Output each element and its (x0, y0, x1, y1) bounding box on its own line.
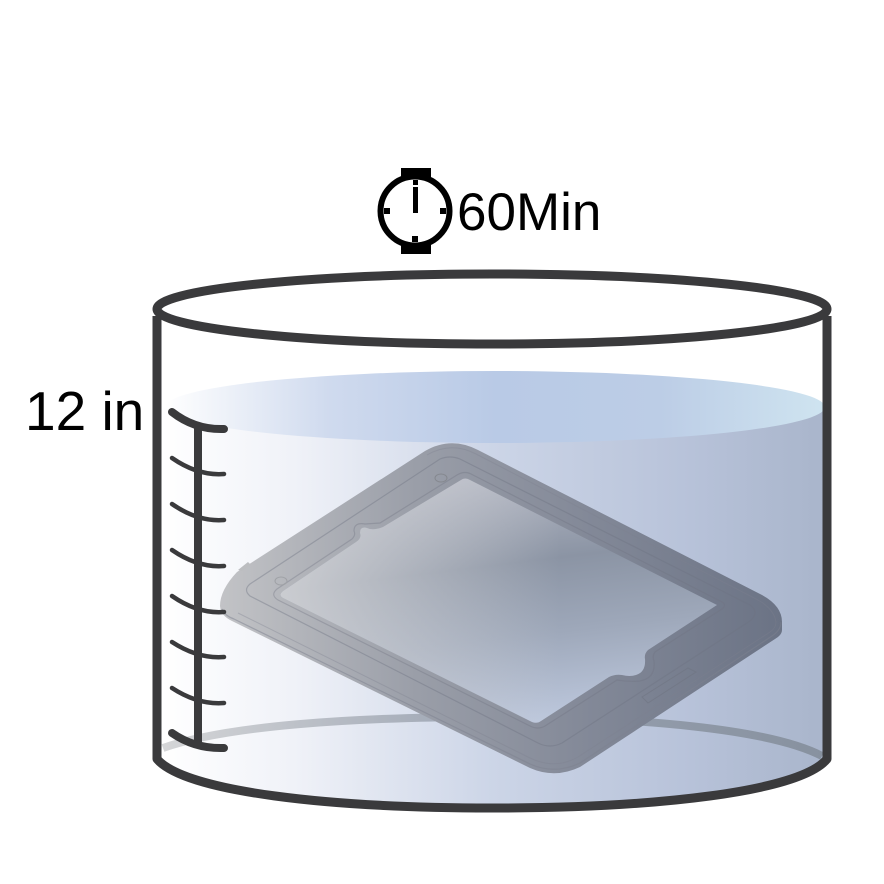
container walls (157, 316, 827, 759)
tablet screen (280, 478, 717, 723)
tablet bezel inner line (274, 472, 724, 728)
tablet side button slot (642, 668, 696, 703)
water surface (165, 371, 825, 443)
container rim (157, 274, 827, 344)
tablet body (220, 443, 782, 773)
tablet camera top (435, 474, 447, 482)
icon: stopwatch (380, 168, 450, 254)
tablet (220, 443, 782, 773)
gauge top mark (172, 412, 224, 429)
container bottom (157, 759, 827, 808)
tablet bezel outer line (246, 457, 755, 746)
container floor far edge (163, 717, 822, 756)
water body (161, 407, 823, 806)
tablet top button (238, 562, 251, 571)
tablet edge lines (222, 609, 781, 769)
tablet camera left (275, 577, 287, 585)
container (157, 274, 827, 808)
depth label: 12 in (25, 380, 144, 442)
time label: 60Min (457, 183, 601, 242)
gauge stem (194, 428, 202, 748)
gauge ticks (172, 458, 224, 703)
gauge bottom mark (172, 733, 224, 748)
depth gauge (172, 412, 224, 748)
